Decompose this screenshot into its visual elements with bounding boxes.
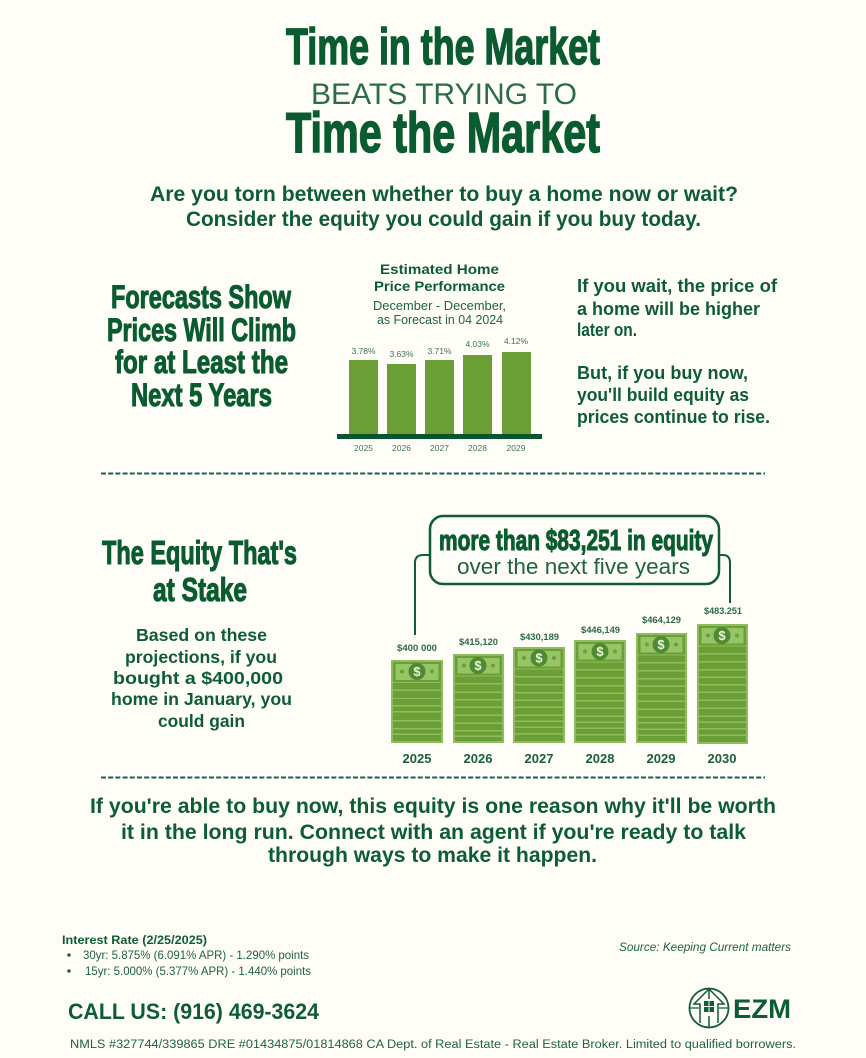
heading: forecasts: Next 5 Years: [131, 377, 272, 413]
stack 2029: $464,129: [642, 615, 681, 625]
stack 2027: [513, 632, 565, 766]
disclaimer: NMLS #327744/339865 DRE #01434875/01814868 CA Dept. of Real Estate - Real Estate Broker. Limited to qualified borrowers.: [70, 1039, 796, 1051]
heading: forecasts: [107, 279, 296, 413]
text block: wait vs buy: prices continue to rise.: [577, 407, 770, 427]
chart title: December - December,: [373, 299, 506, 313]
stack 2026: $: [474, 658, 482, 673]
heading: equity at stake: [102, 534, 297, 608]
source: Source: Keeping Current matters: [619, 942, 791, 954]
stack 2025: $: [413, 664, 421, 679]
stack 2027: $: [535, 650, 543, 666]
text block: wait vs buy: later on.: [577, 320, 637, 340]
heading: equity at stake: The Equity That's: [102, 534, 297, 571]
bar chart: home price performance: [337, 261, 542, 453]
stack 2028: $: [596, 644, 604, 659]
stack 2030: $483.251: [704, 606, 742, 616]
stack 2027: $430,189: [520, 632, 559, 642]
bar chart: home price performance: 3.71%: [427, 346, 452, 356]
text block: projections: could gain: [158, 711, 245, 731]
interest rates: [62, 933, 311, 978]
logo: EZM: EZM: [733, 994, 791, 1024]
chart title: as Forecast in 04 2024: [377, 313, 503, 327]
title: [286, 18, 600, 165]
intro text: Are you torn between whether to buy a home now or wait?: [150, 183, 738, 206]
stack 2030: [697, 606, 748, 766]
text block: projections: Based on these: [136, 625, 267, 645]
heading: forecasts: for at Least the: [115, 344, 288, 380]
bar chart: home price performance: 2029: [507, 443, 526, 453]
title: Time the Market: [286, 101, 600, 165]
call us: CALL US: (916) 469-3624: [68, 999, 320, 1024]
stack 2025: [391, 643, 443, 766]
heading: forecasts: Forecasts Show: [111, 279, 291, 315]
callout: equity gain: [415, 516, 730, 635]
intro text: Consider the equity you could gain if you buy today.: [186, 208, 701, 231]
stack 2029: $: [657, 637, 665, 652]
text block: wait vs buy: a home will be higher: [577, 299, 760, 319]
closing text: If you're able to buy now, this equity is one reason why it'll be worth: [90, 795, 776, 818]
interest rates: 30yr: 5.875% (6.091% APR) - 1.290% points: [83, 948, 309, 962]
stack 2028: [574, 625, 626, 766]
callout: equity gain: over the next five years: [457, 554, 690, 579]
chart title: [373, 261, 506, 327]
bar chart: home price performance: 4.12%: [504, 336, 528, 346]
intro text: [150, 183, 738, 231]
stack 2030: 2030: [708, 751, 736, 766]
chart title: Price Performance: [374, 278, 505, 294]
bar chart: home price performance: 3.78%: [351, 346, 376, 356]
heading: equity at stake: at Stake: [153, 571, 247, 608]
callout: equity gain: more than $83,251 in equity: [439, 525, 713, 557]
closing text: it in the long run. Connect with an agent if you're ready to talk: [121, 821, 746, 844]
title: Time in the Market: [286, 18, 600, 75]
text block: projections: projections, if you: [125, 647, 277, 667]
bar chart: home price performance: 3.63%: [389, 349, 414, 359]
text block: wait vs buy: [577, 276, 778, 427]
text block: projections: bought a $400,000: [113, 668, 283, 688]
logo: EZM: [690, 988, 791, 1028]
bar chart: home price performance: 2026: [392, 443, 411, 453]
heading: forecasts: Prices Will Climb: [107, 312, 296, 348]
text block: wait vs buy: you'll build equity as: [577, 385, 749, 405]
stack 2025: $400 000: [397, 643, 437, 653]
stack 2028: 2028: [586, 751, 614, 766]
interest rates: Interest Rate (2/25/2025): [62, 933, 207, 947]
stack 2026: 2026: [464, 751, 492, 766]
stack 2025: 2025: [403, 751, 431, 766]
stack 2026: [453, 637, 504, 766]
stack 2029: 2029: [647, 751, 675, 766]
text block: wait vs buy: But, if you buy now,: [577, 363, 748, 383]
text block: wait vs buy: If you wait, the price of: [577, 276, 778, 296]
title: BEATS TRYING TO: [311, 78, 577, 111]
closing text: through ways to make it happen.: [268, 844, 597, 867]
text block: projections: home in January, you: [111, 689, 292, 709]
closing text: [90, 795, 776, 867]
stack 2028: $446,149: [581, 625, 620, 635]
stack 2027: 2027: [525, 751, 553, 766]
text block: projections: [111, 625, 292, 731]
stack 2030: $: [718, 628, 726, 643]
bar chart: home price performance: 4.03%: [465, 339, 490, 349]
stack 2029: [636, 615, 687, 766]
stack 2026: $415,120: [459, 637, 498, 647]
bar chart: home price performance: 2027: [430, 443, 449, 453]
chart title: Estimated Home: [380, 261, 499, 277]
bar chart: home price performance: 2025: [354, 443, 373, 453]
interest rates: 15yr: 5.000% (5.377% APR) - 1.440% points: [85, 964, 311, 978]
chart: money stacks: [391, 606, 748, 766]
bar chart: home price performance: 2028: [468, 443, 487, 453]
